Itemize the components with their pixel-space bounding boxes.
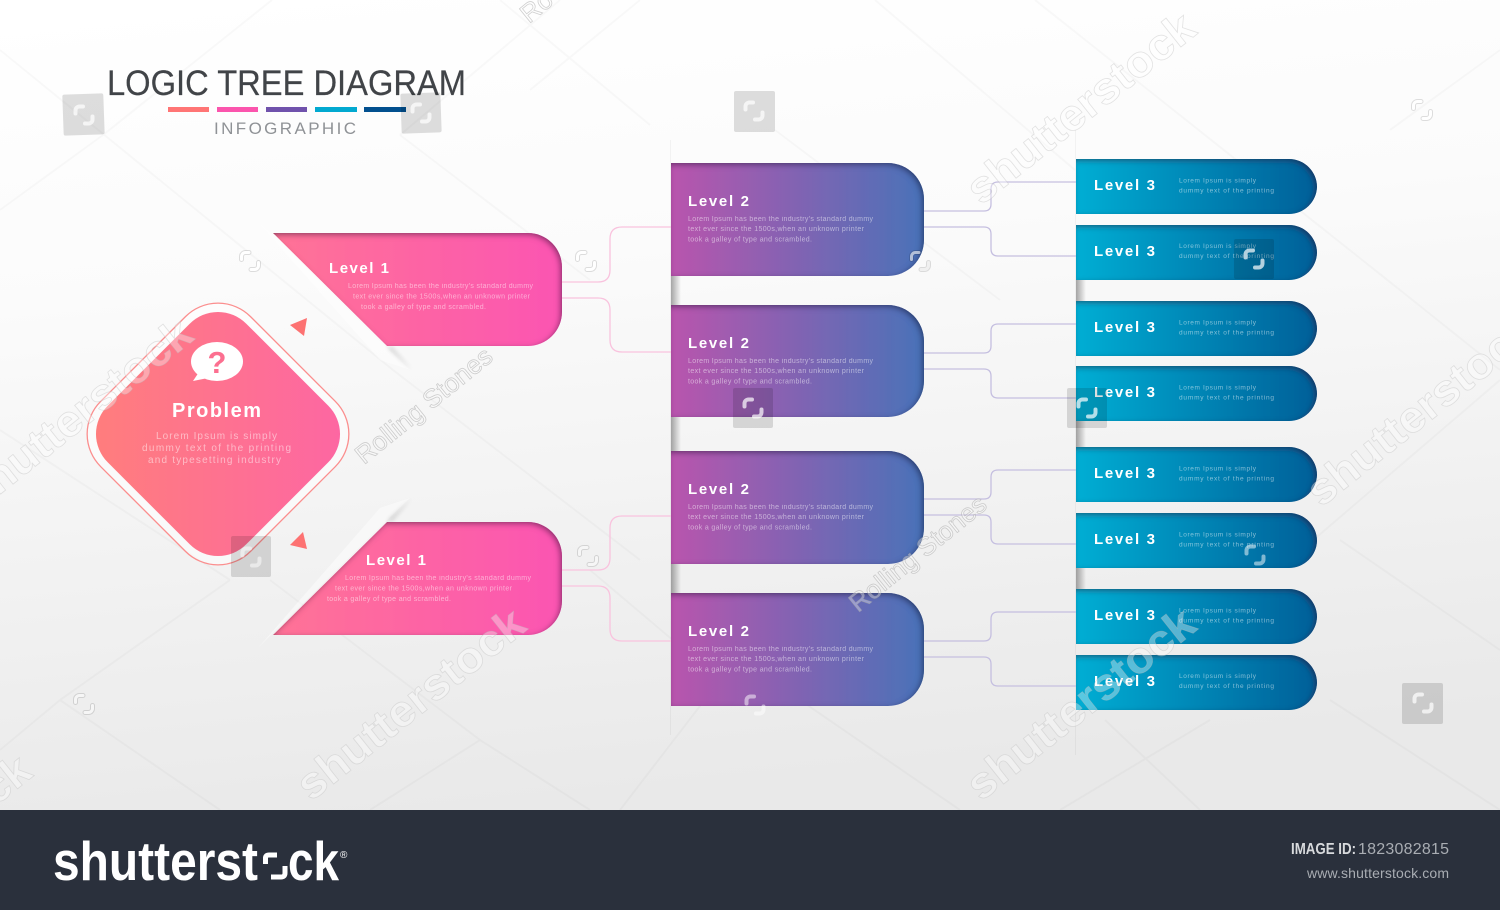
problem heading: Problem	[172, 400, 261, 422]
panel: level 2 c	[671, 451, 924, 564]
problem body text: dummy text of the printing	[142, 443, 291, 454]
body text: took a galley of type and scrambled.	[688, 378, 812, 386]
fold highlights beside level 1	[258, 222, 412, 648]
body text	[348, 283, 534, 311]
label: Level 1	[366, 552, 426, 569]
panel: level 2 d	[671, 593, 924, 706]
body text: Lorem Ipsum is simply	[1179, 384, 1257, 392]
panel: level 3 b	[1076, 225, 1317, 280]
body text: Lorem Ipsum has been the industry's standard dummy	[688, 358, 874, 365]
label: Level 3	[1094, 384, 1155, 401]
panel: level 2 a	[671, 163, 924, 276]
body text: dummy text of the printing	[1179, 394, 1274, 402]
label: Level 1	[329, 260, 389, 277]
body text: dummy text of the printing	[1179, 618, 1274, 624]
body text	[1179, 466, 1274, 482]
body text: text ever since the 1500s,when an unknown printer	[335, 586, 513, 592]
body text: Lorem Ipsum is simply	[1179, 608, 1257, 614]
panel: problem	[68, 284, 368, 584]
body text	[1179, 178, 1274, 194]
footer logo: shutterst	[53, 830, 258, 892]
body text: text ever since the 1500s,when an unknown printer	[688, 226, 865, 233]
body text: Lorem Ipsum has been the industry's standard dummy	[348, 283, 534, 290]
label: Level 3	[1094, 177, 1155, 194]
label: Level 3	[1094, 531, 1155, 548]
body text: Lorem Ipsum is simply	[1179, 243, 1257, 250]
panel: level 3 g	[1076, 589, 1317, 644]
body text: took a galley of type and scrambled.	[361, 304, 486, 311]
heading: logic tree diagram: LOGIC TREE DIAGRAM	[107, 64, 466, 103]
problem body text: Lorem Ipsum is simply	[156, 431, 277, 442]
panel: level 2 b	[671, 305, 924, 417]
body text: Lorem Ipsum is simply	[1179, 178, 1257, 184]
body text: dummy text of the printing	[1179, 542, 1274, 548]
problem body text	[142, 431, 291, 466]
body text: text ever since the 1500s,when an unknown printer	[688, 368, 865, 375]
colour bars	[168, 107, 406, 112]
panel: level 3 h	[1076, 655, 1317, 710]
icon: question speech bubble	[191, 342, 243, 381]
body text: dummy text of the printing	[1179, 476, 1274, 482]
body text: Lorem Ipsum has been the industry's standard dummy	[688, 216, 874, 223]
body text: dummy text of the printing	[1179, 253, 1274, 260]
body text	[1179, 608, 1274, 624]
connectors: level 2 to level 3	[924, 182, 1076, 686]
image id: IMAGE ID:	[1291, 841, 1356, 858]
image id: 1823082815	[1358, 841, 1449, 858]
watermark text: shutterstock	[957, 598, 1205, 810]
body text: Lorem Ipsum has been the industry's standard dummy	[688, 646, 874, 653]
label: Level 3	[1094, 607, 1155, 624]
arrow: triangle down	[290, 532, 307, 549]
body text	[688, 358, 874, 386]
body text: Lorem Ipsum has been the industry's standard dummy	[688, 504, 874, 511]
watermark badges	[62, 91, 1443, 724]
body text: took a galley of type and scrambled.	[688, 524, 812, 532]
panel: level 1 top	[273, 233, 562, 346]
body text: dummy text of the printing	[1179, 683, 1274, 690]
body text	[1179, 673, 1274, 690]
diamond fill	[79, 295, 357, 573]
label: Level 3	[1094, 243, 1155, 260]
website: www.shutterstock.com	[1306, 865, 1449, 881]
body text: text ever since the 1500s,when an unknown printer	[688, 656, 865, 663]
label: Level 2	[688, 335, 749, 352]
watermark text: Rolling Stones	[843, 489, 992, 618]
body text	[688, 504, 874, 532]
label: Level 3	[1094, 465, 1155, 482]
body text	[688, 646, 874, 674]
body text: took a galley of type and scrambled.	[688, 236, 812, 244]
body text: took a galley of type and scrambled.	[688, 666, 812, 674]
label: Level 2	[688, 193, 749, 210]
panel: level 1 bottom	[273, 522, 562, 635]
label: Level 3	[1094, 319, 1155, 336]
label: Level 2	[688, 481, 749, 498]
body text	[1179, 320, 1274, 336]
body text	[1179, 532, 1274, 548]
footer logo: ®	[340, 850, 348, 861]
arrow: triangle up	[290, 318, 307, 336]
label: Level 2	[688, 623, 749, 640]
watermark outline icons	[76, 102, 1430, 714]
body text: Lorem Ipsum is simply	[1179, 466, 1257, 472]
footer logo: ck	[288, 830, 339, 892]
icon: question speech bubble: ?	[208, 345, 226, 380]
panel: level 3 d	[1076, 366, 1317, 421]
subtitle: INFOGRAPHIC	[214, 119, 356, 138]
title	[107, 64, 466, 138]
connectors: level 1 to level 2	[562, 227, 671, 641]
body text	[688, 216, 874, 244]
panel: level 3 e	[1076, 447, 1317, 502]
vertical fold lines	[670, 130, 1086, 755]
image id	[1291, 841, 1449, 858]
body text: Lorem Ipsum is simply	[1179, 673, 1257, 680]
body text: Lorem Ipsum is simply	[1179, 320, 1257, 326]
diamond outline	[68, 284, 368, 584]
watermark text: shutterstock	[287, 598, 535, 810]
body text	[1179, 384, 1274, 402]
body text	[327, 575, 532, 603]
body text: dummy text of the printing	[1179, 188, 1274, 194]
body text: text ever since the 1500s,when an unknown printer	[353, 294, 531, 300]
watermark text: shutterstock	[957, 2, 1205, 214]
footer bar	[0, 810, 1500, 910]
body text	[1179, 243, 1274, 260]
body text: dummy text of the printing	[1179, 330, 1274, 336]
panel: level 3 a	[1076, 159, 1317, 214]
body text: text ever since the 1500s,when an unknown printer	[688, 514, 865, 521]
panel: level 3 f	[1076, 513, 1317, 568]
problem body text: and typesetting industry	[148, 455, 281, 466]
body text: took a galley of type and scrambled.	[327, 596, 451, 603]
label: Level 3	[1094, 673, 1155, 690]
watermark text: Rolling Stones	[349, 341, 498, 470]
body text: Lorem Ipsum is simply	[1179, 532, 1257, 538]
body text: Lorem Ipsum has been the industry's standard dummy	[345, 575, 532, 582]
panel: level 3 c	[1076, 301, 1317, 356]
